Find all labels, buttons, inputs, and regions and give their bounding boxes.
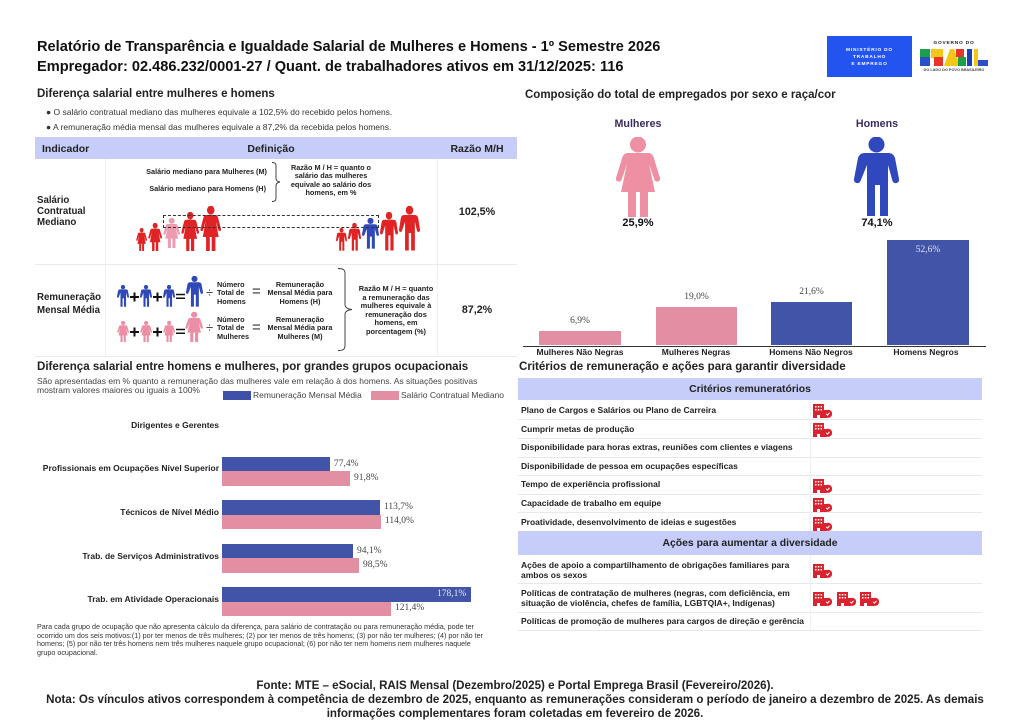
barras administrativos [222,544,353,558]
barras profissionais [222,457,330,471]
categoria 2: Mulheres Negras [662,347,730,357]
legend: Salário Contratual Mediano [401,390,504,400]
title: Relatório de Transparência e Igualdade Salarial de Mulheres e Homens - 1º Semestre 2026 [37,39,660,55]
icon: empresa 6 [813,498,832,512]
25,9%: 25,9% [622,217,654,229]
indicador: salário contratual mediano: Contratual [37,206,85,217]
pictograma: mulheres mediana [136,206,221,251]
número total de mulheres: Mulheres [217,332,249,341]
sinal de divisão homens: ÷ [206,285,213,300]
remuneração média mulheres [268,315,332,341]
valor 94,1%: 94,1% [357,546,382,556]
ação 2: Políticas de contratação de mulheres (negras, com deficiência, em [521,588,790,598]
barras técnicos [222,500,380,515]
indicador: salário contratual mediano [37,195,85,228]
razão texto remuneração: a remuneração das [362,292,430,302]
razão texto: equivale ao salário dos [291,180,371,189]
logo: governo do brasil: GOVERNO DO [933,41,975,46]
icon: empresa ação 1 [813,564,832,578]
critério 5: Tempo de experiência profissional [521,479,660,489]
razão texto: Razão M / H = quanto o [291,163,371,172]
barra mulheres não negras [539,331,621,345]
table header: Indicador [42,143,89,155]
table header: Razão M/H [450,143,504,155]
legend [223,390,504,400]
valor 113,7%: 113,7% [384,502,413,512]
rodapé: informações complementares foram coletadas em fevereiro de 2026. [327,708,703,720]
razão texto remuneração [359,284,433,336]
categoria técnicos: Técnicos de Nível Médio [120,507,219,517]
valor 87,2%: 87,2% [462,304,492,316]
bar chart: composição [523,240,986,357]
categoria administrativos: Trab. de Serviços Administrativos [82,551,219,561]
icon: mulher [616,137,660,217]
nota do gráfico: grupo ocupacional. [37,648,98,656]
valor 114,0%: 114,0% [385,516,414,526]
icon: empresa 7 [813,517,832,531]
razão texto remuneração: remuneração dos [365,310,427,318]
número total de homens: Homens [217,297,246,306]
ação 2: situação de violência, chefes de família, LGBTQIA+, Indígenas) [521,598,775,608]
valor 98,5%: 98,5% [363,560,388,570]
número total de homens: Total de [217,288,244,297]
panel: tabela de indicadores [35,137,517,357]
legend: Remuneração Mensal Média [253,390,362,400]
label mulheres: Mulheres [615,118,661,130]
número total de mulheres [217,315,249,341]
chave [272,162,280,202]
fórmula mulheres [117,312,203,342]
razão texto remuneração: homens, em [374,318,418,327]
rodapé: Nota: Os vínculos ativos correspondem à competência de dezembro de 2025, enquanto as remunerações consideram o período de janeiro a dezembro de 2025. As demais [46,694,984,706]
bullets: ● O salário contratual mediano das mulheres equivale a 102,5% do recebido pelos homens. [46,107,392,117]
table header [35,137,517,159]
heading: grupos ocupacionais: Diferença salarial entre homens e mulheres, por grandes grupos ocupacionais [37,361,468,373]
rodapé [46,680,984,720]
número total de mulheres: Número [217,315,245,324]
categoria dirigentes: Dirigentes e Gerentes [131,420,219,430]
valor 19,0%: 19,0% [684,292,709,302]
critério 1: Plano de Cargos e Salários ou Plano de Carreira [521,405,716,415]
icons: empresa ação 2 [813,592,879,606]
logo: governo do brasil [912,37,995,77]
razão texto [291,163,371,197]
nota do gráfico: ocorrido um dos seis motivos:(1) por ter menos de três mulheres; (2) por ter menos de três homens; (3) por não ter mulheres; (4) por não ter [37,632,483,640]
table header: Definição [247,143,295,155]
categoria operacional: Trab. em Atividade Operacionais [88,594,219,604]
header ações [518,531,982,555]
valor 6,9%: 6,9% [570,316,590,326]
rodapé: Fonte: MTE – eSocial, RAIS Mensal (Dezembro/2025) e Portal Emprega Brasil (Fevereiro/2026). [256,680,774,692]
nota do gráfico: Para cada grupo de ocupação que não apresenta cálculo da diferença, para salário de contratação ou para remuneração média, pode ter [37,623,474,631]
pictograma: homens mediana [336,206,420,251]
definição salário mediano [146,162,371,202]
nota do gráfico: homens; (5) por não ter três homens nem três mulheres naquele grupo ocupacional; (6) por não ter nem homens nem mulheres naquele [37,640,471,648]
ação 1: Ações de apoio a compartilhamento de obrigações familiares para [521,560,789,570]
critério 2: Cumprir metas de produção [521,424,634,434]
remuneração média mulheres: Mensal Média para [268,323,332,332]
razão texto remuneração: porcentagem (%) [366,326,426,336]
subtítulo: São apresentadas em % quanto a remuneração das mulheres vale em relação à dos homens. As situações positivas [37,376,477,386]
critério 3: Disponibilidade para horas extras, reuniões com clientes e viagens [521,442,793,452]
barras operacional [222,587,471,602]
logo: ministério: MINISTÉRIO DO [846,48,893,53]
header critérios remuneratórios: Critérios remuneratórios [689,384,811,395]
ação 1 [521,560,790,580]
valor 121,4%: 121,4% [395,603,424,613]
razão texto: salário das mulheres [295,171,367,180]
critério 6: Capacidade de trabalho em equipe [521,498,661,508]
retângulo pontilhado mediana [163,215,379,228]
categoria profissionais: Profissionais em Ocupações Nível Superior [43,463,219,473]
barra homens não negros [771,302,852,345]
valor 102,5%: 102,5% [459,206,495,218]
critério 4: Disponibilidade de pessoa em ocupações específicas [521,461,738,471]
categoria 1: Mulheres Não Negras [537,347,623,357]
remuneração média mulheres: Remuneração [276,315,324,324]
remuneração média homens: Remuneração [276,280,324,289]
heading: critérios: Critérios de remuneração e ações para garantir diversidade [519,361,846,373]
bar chart: grupos ocupacionais [43,420,471,616]
74,1%: 74,1% [861,217,893,229]
ação 3: Políticas de promoção de mulheres para cargos de direção e gerência [521,616,804,626]
bullets: ● A remuneração média mensal das mulheres equivale a 87,2% da recebida pelos homens. [46,122,391,132]
nota do gráfico [37,623,483,656]
indicador: salário contratual mediano: Mediano [37,217,76,228]
número total de homens [217,280,246,306]
fórmula homens [117,276,203,307]
barra homens negros [887,240,969,345]
remuneração média homens: Mensal Média para [268,288,332,297]
razão texto remuneração: Razão M / H = quanto [359,284,433,293]
igual homens: = [252,283,261,300]
icon: empresa 2 [813,423,832,437]
número total de homens: Número [217,280,245,289]
razão texto: homens, em % [305,188,357,197]
label mulheres: Salário mediano para Mulheres (M) [146,167,267,176]
heading: composição: Composição do total de empregados por sexo e raça/cor [525,89,836,101]
chave grande [338,268,352,351]
valor 77,4%: 77,4% [334,459,359,469]
label homens: Homens [856,118,898,130]
heading: diferença salarial: Diferença salarial entre mulheres e homens [37,88,275,100]
barra mulheres negras [656,307,737,345]
title: Empregador: 02.486.232/0001-27 / Quant. de trabalhadores ativos em 31/12/2025: 116 [37,59,624,75]
legenda salário [371,391,399,400]
indicador: remuneração mensal média: Mensal Média [37,304,100,316]
indicador: salário contratual mediano: Salário [37,195,69,206]
icon: empresa 5 [813,479,832,493]
remuneração média homens: Homens (H) [280,297,320,306]
panel: critérios [518,378,982,631]
label homens: Salário mediano para Homens (H) [149,184,266,193]
ação 1: ambos os sexos [521,570,587,580]
remuneração média homens [268,280,332,306]
icon: homem [854,137,899,216]
subtítulo: mostram valores maiores ou iguais a 100% [37,385,200,395]
critério 7: Proatividade, desenvolvimento de ideias e sugestões [521,517,736,527]
razão texto remuneração: mulheres equivale à [361,301,431,310]
ação 2 [521,588,790,608]
legenda remuneração [223,391,251,400]
igual mulheres: = [252,319,261,336]
header critérios remuneratórios [518,378,982,400]
header ações: Ações para aumentar a diversidade [662,538,838,549]
número total de mulheres: Total de [217,323,244,332]
valor 21,6%: 21,6% [799,287,824,297]
valor 52,6%: 52,6% [916,245,940,255]
logo: ministério: TRABALHO [853,55,886,60]
title [37,39,660,75]
indicador: remuneração mensal média: Remuneração [37,292,101,303]
categoria 4: Homens Negros [893,347,959,357]
categoria 3: Homens Não Negros [769,347,853,357]
remuneração média mulheres: Mulheres (M) [278,332,322,341]
logo: governo do brasil: DO LADO DO POVO BRASILEIRO [924,68,984,72]
valor 178,1%: 178,1% [437,589,466,599]
logo: ministério [827,36,912,77]
indicador: remuneração mensal média [37,292,101,316]
icon: empresa 1 [813,404,832,418]
subtítulo [37,376,478,395]
sinal de divisão mulheres: ÷ [206,320,213,335]
valor 91,8%: 91,8% [354,473,379,483]
bullets [46,107,392,132]
logo: ministério: E EMPREGO [851,62,888,67]
